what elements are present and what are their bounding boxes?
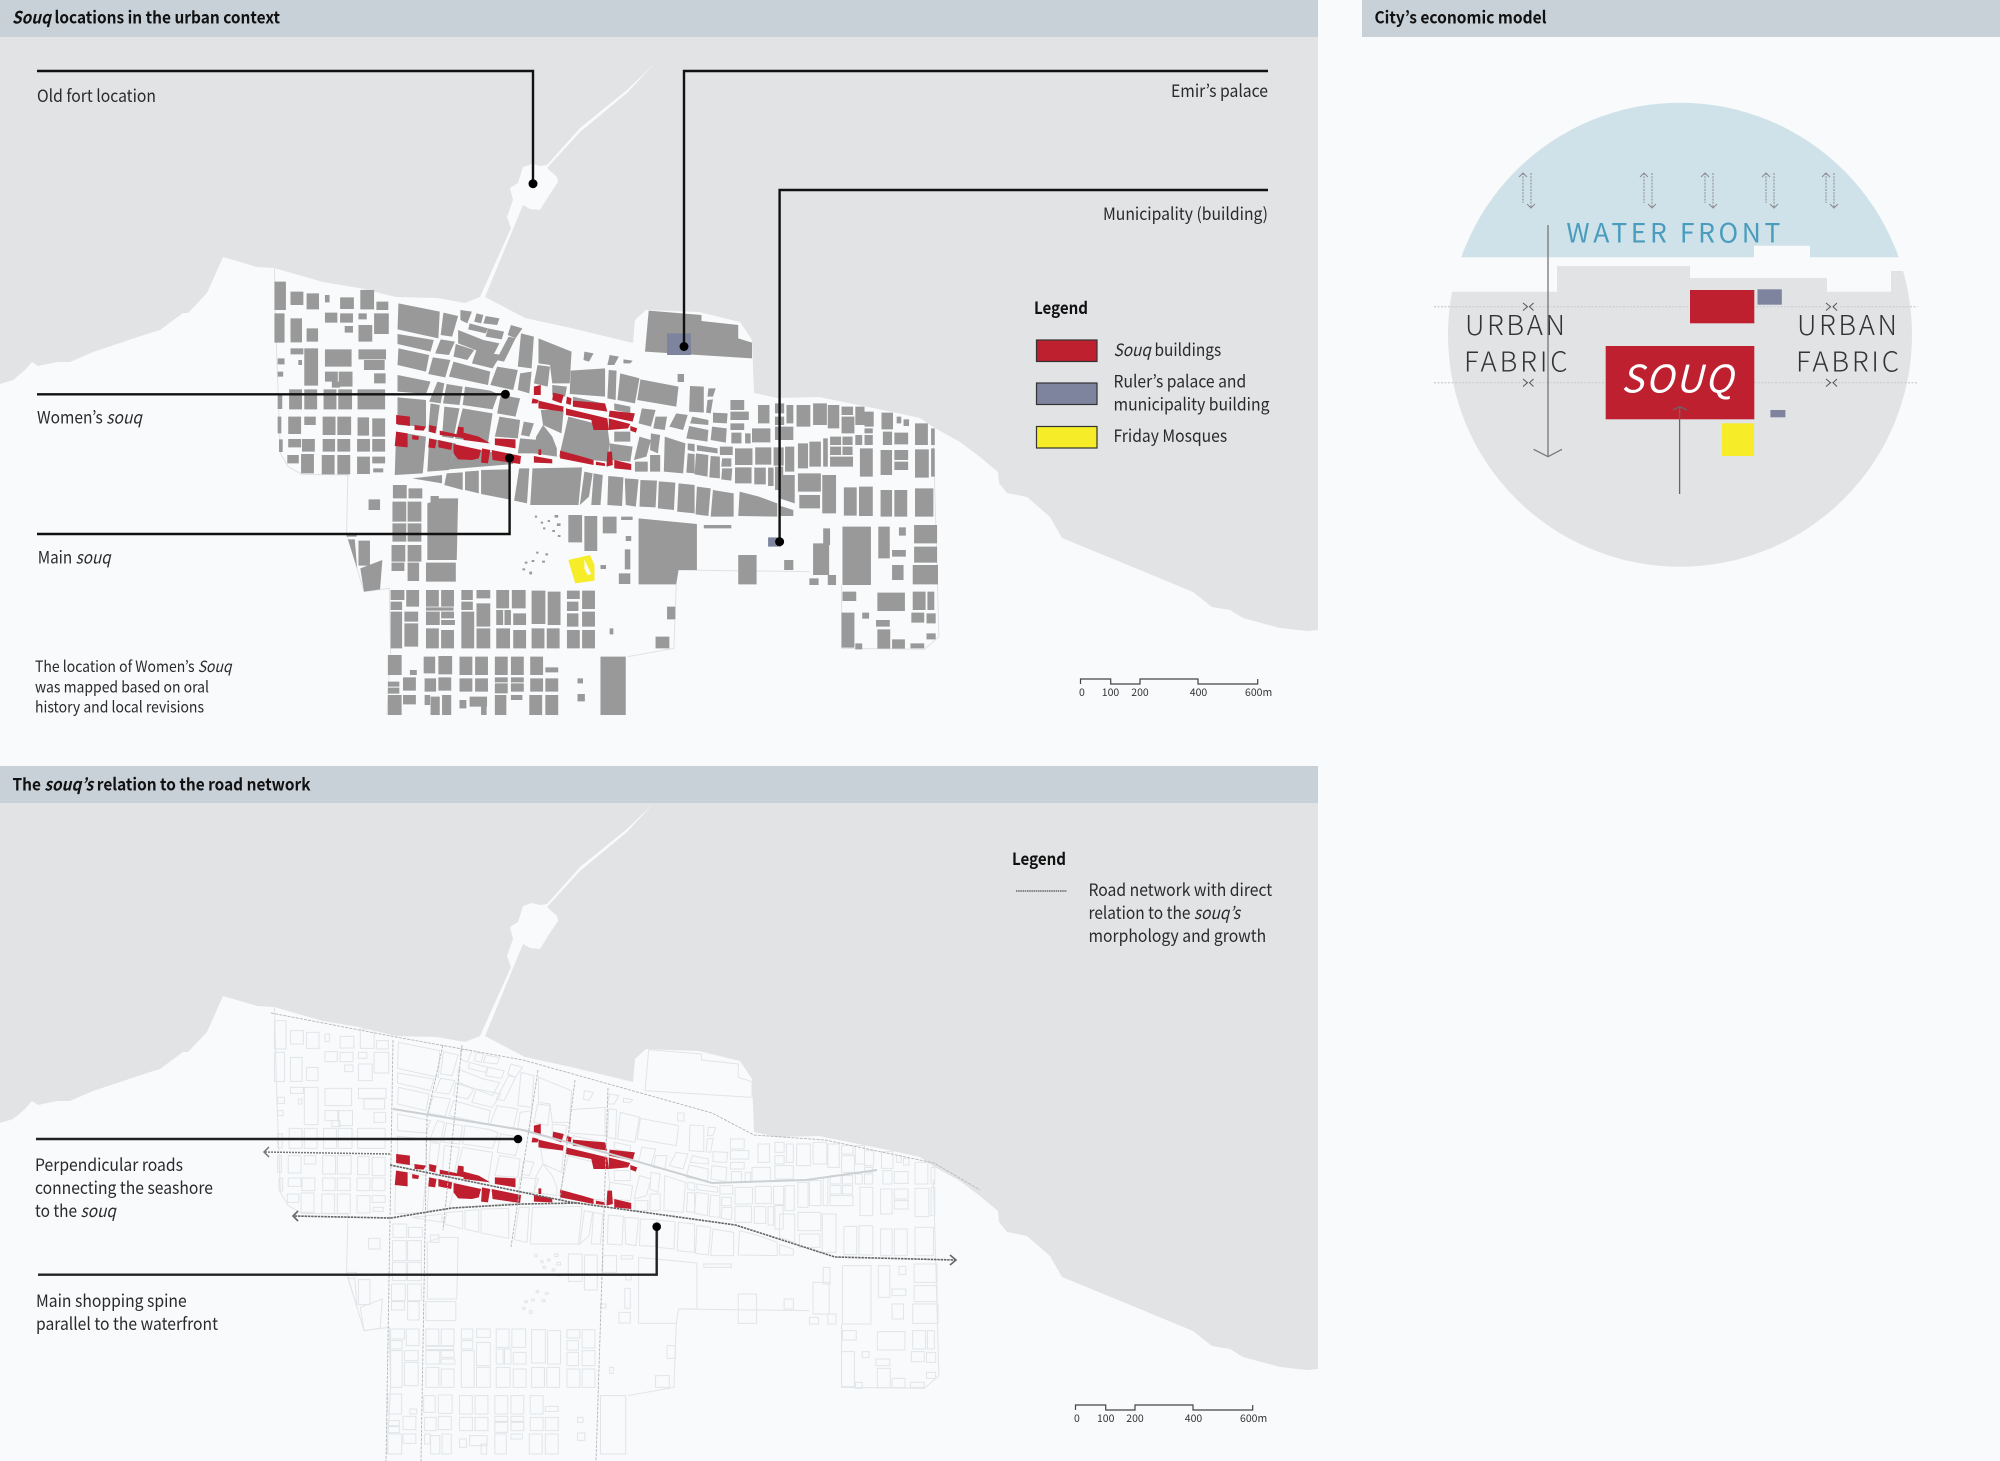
legend: municipality building xyxy=(1114,390,1270,416)
callout: emir's palace: Emir’s palace xyxy=(1171,77,1268,102)
icon: double arrows from the waterfront xyxy=(1519,173,1838,208)
scale bar: 200 xyxy=(1126,1411,1144,1426)
urban fabric label left: URBAN xyxy=(1465,303,1565,343)
municipality block xyxy=(1770,410,1785,417)
callout: main shopping spine: Main shopping spine xyxy=(36,1287,187,1312)
legend: Legend xyxy=(1012,845,1066,870)
scale bar: 600m xyxy=(1240,1411,1267,1426)
scale bar: 200 xyxy=(1131,685,1149,700)
sea area xyxy=(0,803,1318,1370)
outlined city plan map xyxy=(274,1007,939,1454)
icon: palace and municipality buildings xyxy=(667,333,781,547)
callout: old fort location: Old fort location xyxy=(37,82,156,107)
callout: women's souq xyxy=(37,390,510,429)
callout: perpendicular roads xyxy=(35,1135,522,1222)
urban fabric label right: FABRIC xyxy=(1796,340,1899,380)
water front label: WATER FRONT xyxy=(1566,212,1781,251)
road arrow: lower west xyxy=(293,1203,580,1221)
legend: Friday Mosques xyxy=(1114,422,1227,447)
city plan map xyxy=(274,268,939,715)
icon: converging markers xyxy=(1523,303,1837,386)
legend xyxy=(1034,294,1270,448)
sea area xyxy=(0,37,1318,631)
header bar xyxy=(0,766,1318,803)
legend: Legend xyxy=(1034,294,1088,319)
note on women's souq mapping: The location of Women’s Souq xyxy=(35,655,233,677)
scale bar: 600m xyxy=(1245,685,1272,700)
mosque block xyxy=(1722,423,1754,456)
callout: perpendicular roads: to the souq xyxy=(35,1197,117,1222)
header bar xyxy=(0,0,1318,37)
header bar xyxy=(1362,0,2000,37)
urban fabric label right xyxy=(1796,303,1899,380)
scale bar xyxy=(1079,679,1272,700)
scale bar: 400 xyxy=(1190,685,1207,700)
note on women's souq mapping: was mapped based on oral xyxy=(35,675,209,697)
panel: souq locations in the urban context xyxy=(0,0,1318,718)
heading: City’s economic model xyxy=(1374,4,1546,29)
legend: Ruler’s palace and xyxy=(1114,368,1246,392)
callout: municipality: Municipality (building) xyxy=(1103,200,1268,225)
callout: main shopping spine: parallel to the waterfront xyxy=(36,1310,219,1335)
callout: main souq xyxy=(37,454,514,568)
callout: perpendicular roads: Perpendicular roads xyxy=(35,1151,183,1176)
upper road xyxy=(393,1109,877,1183)
callout: municipality xyxy=(775,190,1268,546)
legend: Souq buildings xyxy=(1114,336,1221,361)
scale bar: 100 xyxy=(1102,685,1119,700)
perpendicular and coastal roads xyxy=(271,1013,980,1461)
dotted fabric lines xyxy=(1434,307,1918,383)
callout: emir's palace xyxy=(680,71,1268,351)
panel: the souq's relation to the road network xyxy=(0,766,1318,1461)
legend xyxy=(1012,845,1273,947)
note on women's souq mapping: history and local revisions xyxy=(35,696,204,718)
small souq block xyxy=(1690,290,1754,323)
scale bar: 100 xyxy=(1097,1411,1115,1426)
road arrow: upper west xyxy=(264,1147,390,1157)
scale bar: 0 xyxy=(1079,685,1085,700)
callout: old fort location xyxy=(37,71,538,188)
main souq block xyxy=(1606,346,1754,419)
urban fabric label left xyxy=(1464,303,1568,380)
callout: perpendicular roads: connecting the seashore xyxy=(35,1174,213,1199)
main shopping spine road with arrow xyxy=(390,1165,956,1265)
heading: Souq locations in the urban context xyxy=(12,4,280,29)
legend: Road network with direct xyxy=(1088,876,1273,901)
callout: main shopping spine xyxy=(36,1222,661,1335)
urban fabric zone xyxy=(1440,266,1920,570)
arrow: upward growth xyxy=(1673,407,1687,494)
urban fabric label right: URBAN xyxy=(1797,303,1897,343)
scale bar xyxy=(1074,1405,1267,1426)
heading: The souq’s relation to the road network xyxy=(12,770,311,796)
callout: main souq: Main souq xyxy=(38,544,112,568)
callout: women's souq: Women’s souq xyxy=(37,404,143,429)
legend: relation to the souq’s xyxy=(1088,899,1242,924)
waterfront zone xyxy=(1462,102,1898,258)
note on women's souq mapping xyxy=(35,655,233,718)
palace block xyxy=(1758,289,1782,305)
scale bar: 0 xyxy=(1074,1411,1080,1426)
urban fabric label left: FABRIC xyxy=(1464,340,1568,380)
scale bar: 400 xyxy=(1185,1411,1202,1426)
arrow: downward growth xyxy=(1534,225,1562,457)
main souq block: SOUQ xyxy=(1621,349,1737,404)
panel: city's economic model xyxy=(1362,0,2000,570)
icon: Friday mosque xyxy=(568,555,595,583)
legend: morphology and growth xyxy=(1088,922,1266,947)
